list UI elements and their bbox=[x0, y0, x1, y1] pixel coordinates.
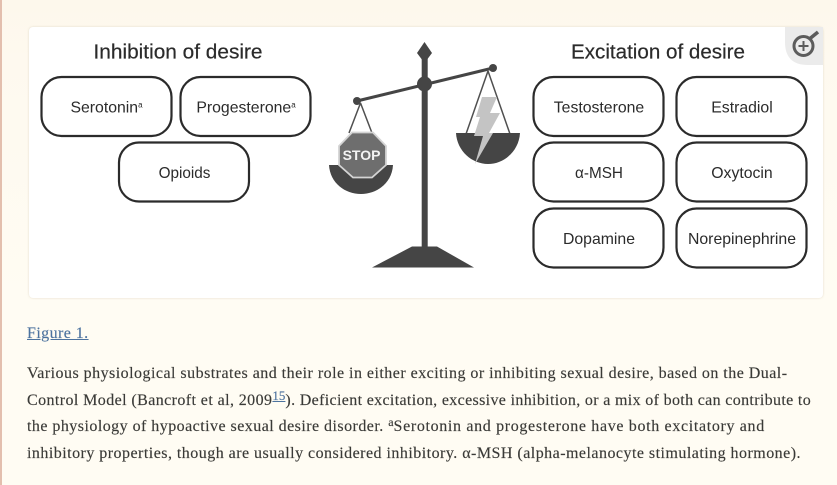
icon: stop sign bbox=[339, 132, 386, 178]
box: progesterone: Progesterone bbox=[196, 100, 291, 116]
box: progesterone: a bbox=[291, 100, 296, 110]
icon: stop sign: STOP bbox=[343, 147, 380, 163]
caption text: the physiology of hypoactive sexual desire disorder. aSerotonin and progesterone have both excitatory and bbox=[27, 415, 765, 435]
box: estradiol: Estradiol bbox=[711, 100, 773, 116]
box: opioids bbox=[119, 142, 249, 202]
icon: balance scale bbox=[329, 42, 520, 268]
heading: inhibition of desire: Inhibition of desire bbox=[94, 42, 262, 64]
icon: left pan bbox=[329, 165, 393, 194]
box: oxytocin: Oxytocin bbox=[711, 165, 773, 182]
box: progesterone bbox=[180, 77, 310, 136]
box: serotonin bbox=[42, 77, 172, 136]
heading: excitation of desire: Excitation of desire bbox=[571, 42, 745, 64]
icon: lightning bolt bbox=[474, 97, 500, 164]
box: dopamine: Dopamine bbox=[563, 231, 635, 248]
box: alpha-MSH: α-MSH bbox=[575, 165, 623, 182]
box: testosterone bbox=[534, 77, 664, 136]
caption text: Various physiological substrates and their role in either exciting or inhibiting sexual desire, based on the Dual- bbox=[27, 365, 788, 382]
icon: zoom button bbox=[785, 27, 823, 65]
caption text: inhibitory properties, though are usually considered inhibitory. α-MSH (alpha-melanocyte stimulating hormone). bbox=[27, 445, 801, 462]
box: oxytocin bbox=[676, 142, 806, 202]
box: serotonin: a bbox=[138, 100, 143, 110]
right pan strings bbox=[466, 71, 510, 134]
box: serotonin: Serotonin bbox=[70, 100, 138, 116]
figure link: Figure 1. bbox=[27, 325, 89, 342]
icon: right pan bbox=[456, 133, 520, 164]
left pan strings bbox=[349, 103, 372, 133]
box: norepinephrine: Norepinephrine bbox=[688, 231, 796, 248]
box: alpha-MSH bbox=[534, 142, 664, 202]
box: testosterone: Testosterone bbox=[554, 100, 644, 116]
box: opioids: Opioids bbox=[159, 165, 211, 182]
caption text: Control Model (Bancroft et al, 200915). Deficient excitation, excessive inhibition, or a mix of both can contribute to bbox=[27, 388, 811, 409]
box: dopamine bbox=[534, 208, 664, 268]
box: estradiol bbox=[676, 77, 806, 136]
panel: figure bbox=[29, 27, 823, 298]
box: norepinephrine bbox=[676, 208, 806, 268]
